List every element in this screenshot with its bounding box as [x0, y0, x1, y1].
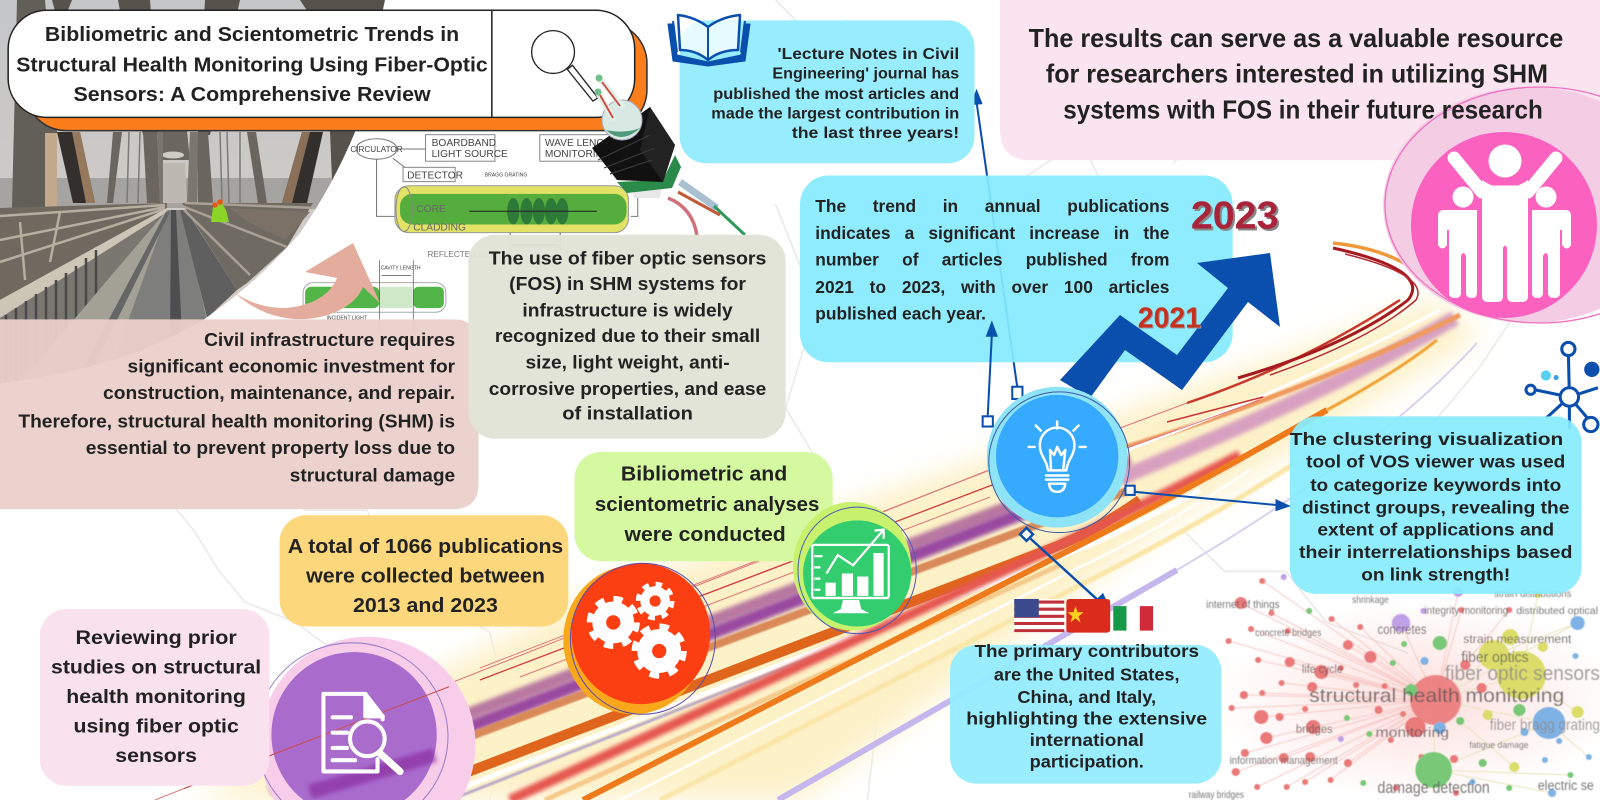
photo: bridge [0, 0, 390, 385]
network visualization: keyword clusters: integrity monitoring [1424, 605, 1508, 617]
network visualization: keyword clusters: shrinkage [1352, 595, 1389, 606]
title panel [8, 10, 647, 131]
text: trend description [815, 194, 1169, 332]
panel: reviewing prior studies [40, 609, 269, 786]
network visualization: keyword clusters: concretes [1378, 621, 1427, 637]
network visualization: keyword clusters: fatigue damage [1469, 740, 1529, 750]
panel: civil infrastructure: Civil infrastructure requires [204, 329, 455, 350]
panel: Lecture Notes journal: made the largest contribution in [711, 105, 959, 122]
panel: fiber optic sensors: (FOS) in SHM systems for [509, 273, 747, 294]
network visualization: keyword clusters: concrete bridges [1255, 628, 1321, 639]
network visualization: keyword clusters: monitoring [1376, 724, 1449, 740]
text: trend description: published each year. [815, 304, 986, 323]
panel: fiber optic sensors: corrosive properties, and ease [489, 378, 766, 399]
panel: results resource [1000, 0, 1600, 160]
streaks: flowing light rays [155, 243, 1480, 800]
icon: magnifying glass [532, 31, 598, 101]
panel: Lecture Notes journal [680, 20, 974, 163]
diagram: fiber Bragg grating schematic: CIRCULATOR [350, 145, 403, 154]
panel: primary contributors: are the United States, [994, 665, 1180, 685]
icon: US flag [1014, 599, 1064, 633]
panel: Lecture Notes journal: 'Lecture Notes in Civil [778, 46, 959, 63]
icon: red gears circle [563, 563, 715, 714]
diagram: fiber Bragg grating schematic: BOARDBAND [432, 138, 496, 149]
panel: clustering visualization: their interrelationships based [1299, 542, 1572, 562]
panel: clustering visualization: The clustering visualization [1290, 429, 1563, 449]
workers [211, 202, 229, 222]
title text: Sensors: A Comprehensive Review [73, 84, 431, 106]
panel: civil infrastructure: construction, maintenance, and repair. [103, 382, 455, 403]
text: results resource [1029, 25, 1563, 124]
icon: Italy flag [1113, 606, 1153, 631]
panel: bibliometric analyses: were conducted [623, 524, 786, 546]
icon: network node [1526, 342, 1598, 432]
panel: primary contributors: China, and Italy, [1017, 687, 1156, 707]
title text: Bibliometric and Scientometric Trends in [45, 24, 459, 46]
panel: fiber optic sensors [468, 235, 786, 439]
diagram: fiber Bragg grating schematic: BRAGG GRATING [485, 173, 527, 179]
panel: civil infrastructure [0, 319, 479, 509]
arrow: to journal panel [970, 89, 1022, 399]
arrow: to trend panel [983, 320, 998, 427]
panel: civil infrastructure: Therefore, structural health monitoring (SHM) is [18, 411, 455, 432]
arrow: to country flags [1020, 528, 1110, 609]
panel: fiber optic sensors: The use of fiber optic sensors [489, 247, 766, 268]
icon: China flag [1066, 599, 1110, 633]
diagram: Fabry-Perot cavity schematic [303, 260, 446, 332]
diagram: fiber Bragg grating schematic: CORE [416, 204, 446, 215]
panel: clustering visualization: tool of VOS viewer was used [1306, 451, 1565, 471]
icon: rising blue arrow [1060, 253, 1280, 398]
panel: total publications: A total of 1066 publications [288, 536, 563, 558]
arrow: salmon curved arrow [235, 243, 380, 319]
panel: clustering visualization [1290, 416, 1582, 594]
text: results resource: systems with FOS in their future research [1063, 96, 1543, 124]
panel: annual trend [800, 176, 1233, 362]
label: 2021: 2021 [1139, 304, 1202, 336]
arrow: to clustering panel [1126, 486, 1291, 511]
panel: bibliometric analyses: Bibliometric and [621, 464, 787, 486]
diagram: Fabry-Perot cavity schematic: CAVITY LENGTH [381, 265, 421, 271]
panel: fiber optic sensors: recognized due to their small [495, 325, 760, 346]
panel: fiber optic sensors: size, light weight, anti- [526, 351, 730, 372]
diagram: Fabry-Perot cavity schematic: INCIDENT LIGHT [327, 315, 367, 321]
panel: primary contributors [950, 641, 1221, 784]
text: results resource: The results can serve as a valuable resource [1029, 25, 1563, 53]
diagram: fiber Bragg grating schematic [350, 135, 638, 259]
network visualization: keyword clusters [1189, 574, 1600, 800]
panel: clustering visualization: to categorize keywords into [1310, 475, 1561, 495]
panel: fiber optic sensors: of installation [562, 402, 693, 423]
text: trend description: indicates a significant increase in the [815, 224, 1169, 243]
panel: primary contributors: The primary contributors [974, 641, 1199, 661]
text: trend description: The trend in annual publications [815, 197, 1169, 216]
diagram: fiber Bragg grating schematic: REFLECTED LIGHT [428, 250, 502, 259]
panel: primary contributors: international [1030, 730, 1144, 750]
network visualization: keyword clusters: fiber optics [1461, 649, 1529, 666]
network visualization: keyword clusters: damage detection [1378, 777, 1490, 797]
panel: bibliometric analyses [574, 452, 833, 561]
panel: reviewing prior studies: using fiber optic [73, 716, 239, 738]
panel: Lecture Notes journal: the last three years! [792, 125, 959, 142]
panel: reviewing prior studies: studies on structural [51, 656, 261, 678]
text: results resource: for researchers interested in utilizing SHM [1046, 61, 1548, 89]
panel: reviewing prior studies: Reviewing prior [76, 627, 237, 649]
network visualization: keyword clusters: life cycle [1302, 662, 1343, 676]
diagram: fiber Bragg grating schematic: WAVE LENGTH [545, 138, 618, 149]
icon: purple document circle [184, 637, 476, 800]
icon: lightbulb circle [987, 387, 1130, 533]
text: trend description: 2021 to 2023, with over 100 articles [815, 277, 1169, 297]
panel: primary contributors: participation. [1030, 751, 1144, 771]
panel: bibliometric analyses: scientometric analyses [595, 494, 819, 516]
icon: open book [668, 15, 750, 66]
right railing [182, 203, 313, 290]
title text [16, 24, 488, 106]
diagram: fiber Bragg grating schematic: DETECTOR [407, 171, 463, 182]
icon: people in pink circle [1383, 87, 1600, 323]
panel: clustering visualization: extent of applications and [1317, 520, 1554, 540]
network visualization: keyword clusters: information management [1230, 755, 1338, 767]
diagram: fiber Bragg grating schematic: CLADDING [413, 223, 466, 234]
panel: fiber optic sensors: infrastructure is widely [522, 299, 733, 320]
network visualization: keyword clusters: distributed optical [1516, 606, 1598, 617]
network visualization: keyword clusters: structural health monitoring [1309, 686, 1564, 707]
panel: civil infrastructure: significant economic investment for [128, 355, 456, 376]
left pillar [12, 0, 57, 208]
network visualization: keyword clusters: bridges [1296, 722, 1333, 736]
panel: civil infrastructure: essential to prevent property loss due to [86, 437, 455, 458]
panel: total publications: were collected between [305, 566, 545, 588]
panel: reviewing prior studies: sensors [115, 745, 197, 767]
label: 2023: 2023 [1191, 195, 1279, 238]
panel: clustering visualization: distinct groups, revealing the [1302, 497, 1570, 517]
panel: total publications: 2013 and 2023 [353, 595, 498, 617]
icon: fiber optic sensor device [592, 74, 745, 236]
panel: Lecture Notes journal: Engineering' journal has [772, 66, 959, 83]
deck [74, 210, 206, 320]
text: trend description: number of articles published from [815, 250, 1169, 270]
diagram: fiber Bragg grating schematic: LIGHT SOURCE [432, 149, 508, 160]
icon: green chart circle [793, 502, 916, 634]
label: 2023: 2023 [1193, 197, 1281, 240]
diagram: fiber Bragg grating schematic: MONITORING [545, 149, 611, 160]
title text: Structural Health Monitoring Using Fiber-Optic [16, 54, 488, 76]
network visualization: keyword clusters: internet of things [1206, 599, 1280, 611]
panel: clustering visualization: on link strength! [1361, 565, 1510, 585]
network visualization: keyword clusters: strain measurement [1463, 632, 1572, 646]
network visualization: keyword clusters: strain distributions [1494, 589, 1571, 600]
panel: Lecture Notes journal: published the most articles and [713, 86, 959, 103]
panel: primary contributors: highlighting the extensive [966, 708, 1208, 728]
left railing [0, 203, 167, 300]
label: 2021: 2021 [1138, 303, 1201, 335]
panel: reviewing prior studies: health monitoring [66, 686, 246, 708]
panel: total publications [280, 515, 568, 627]
panel: civil infrastructure: structural damage [290, 465, 455, 486]
